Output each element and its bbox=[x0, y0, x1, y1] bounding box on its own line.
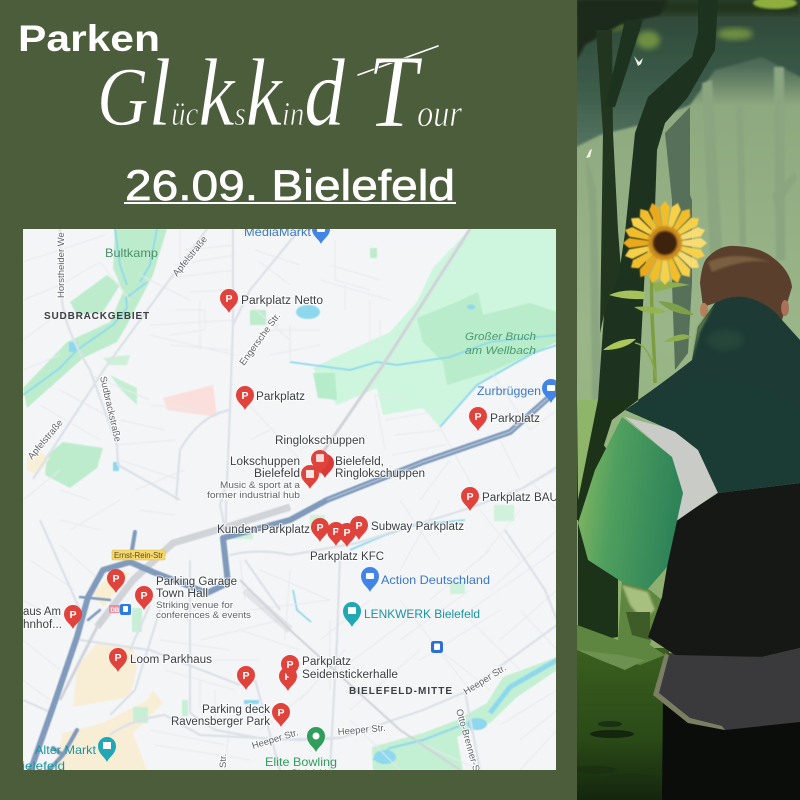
map labels: districts and streets: Str. bbox=[218, 754, 229, 768]
map labels: coloured points of interest: LENKWERK Bielefeld bbox=[364, 607, 480, 621]
map labels: parking and places: former industrial hub bbox=[207, 490, 300, 501]
map labels: coloured points of interest: Zurbrüggen bbox=[477, 384, 541, 398]
road sign: Ernst-Rein-Str: Ernst-Rein-Str bbox=[114, 551, 163, 560]
map labels: parking and places: Striking venue for bbox=[156, 600, 233, 611]
map labels: parking and places: Loom Parkhaus bbox=[130, 654, 212, 666]
pin: Parkhaus am Bahnhof bbox=[64, 605, 82, 629]
map labels: districts and streets: Engersche Str. bbox=[238, 311, 283, 368]
icon: bus stop bbox=[431, 641, 443, 653]
map labels: coloured points of interest: Bielefeld bbox=[292, 768, 327, 778]
icon: DB station bbox=[109, 604, 131, 615]
map labels: districts and streets: Bultkamp bbox=[105, 246, 158, 260]
person: hem bbox=[653, 648, 800, 730]
forest floor bbox=[573, 580, 669, 800]
map labels: districts and streets: Sudbrackstraße bbox=[97, 375, 123, 443]
person: teal upper body bbox=[625, 340, 800, 493]
person: hood bbox=[638, 297, 800, 410]
map streets bbox=[23, 229, 560, 770]
map labels: parking and places: aus Am bbox=[23, 606, 61, 618]
map labels: parking and places: Bielefeld, bbox=[335, 456, 384, 468]
map labels: parking and places: hnhof... bbox=[23, 619, 62, 631]
misty forest background bbox=[577, 0, 800, 660]
map labels: parking and places: Parkplatz Netto bbox=[241, 295, 323, 307]
mid-distance tree bbox=[665, 107, 692, 370]
map labels: coloured points of interest bbox=[13, 225, 541, 778]
icon: white butterflies bbox=[586, 56, 643, 158]
map labels: districts and streets: Heeper Str. bbox=[251, 727, 300, 752]
map areas: parks and land use bbox=[23, 229, 557, 770]
person: dark jacket body bbox=[648, 483, 800, 657]
map labels: parking and places: Music & sport at a bbox=[220, 480, 301, 491]
pin: Kunden-Parkplatz bbox=[311, 518, 329, 542]
map labels: parking and places: Parkplatz bbox=[490, 413, 540, 425]
map labels: parking and places: Lokschuppen bbox=[230, 456, 300, 468]
pin: Parkplatz east bbox=[469, 407, 487, 431]
person: ears bbox=[700, 303, 708, 317]
map labels: districts and streets: am Wellbach bbox=[465, 345, 536, 357]
map labels: districts and streets: SUDBRACKGEBIET bbox=[44, 311, 150, 322]
pin: Kunden-Parkplatz: P bbox=[316, 522, 324, 534]
pin: Parking deck Ravensberger Park: P bbox=[277, 707, 285, 719]
map labels: coloured points of interest: Alter Markt bbox=[35, 743, 97, 757]
map labels: districts and streets: Apfelstraße bbox=[171, 234, 210, 279]
map motorway bbox=[30, 392, 555, 772]
icon: Zurbrüggen blue pin bbox=[542, 379, 556, 403]
panel: parking map bbox=[13, 220, 560, 780]
pin: Parkplatz KFC two: P bbox=[343, 527, 351, 539]
sunflower stem and leaves bbox=[603, 273, 694, 383]
pin: Ringlokschuppen music bbox=[320, 454, 334, 478]
pin: Parkplatz BAU bbox=[461, 487, 479, 511]
pin: Parkplatz Netto bbox=[220, 289, 238, 313]
person seen from behind bbox=[578, 246, 800, 800]
map labels: parking and places: conferences & events bbox=[156, 610, 251, 621]
map labels: coloured points of interest: Elite Bowling bbox=[265, 755, 337, 769]
pin: Parkhaus am Bahnhof: P bbox=[69, 609, 77, 621]
pin: Lokschuppen venue bbox=[301, 465, 319, 489]
map labels: districts and streets: Horstheider We bbox=[56, 232, 67, 298]
map labels: parking and places: Ringlokschuppen bbox=[275, 435, 365, 447]
heading: Glückskind Tour script title: Tour bbox=[368, 34, 462, 149]
icon: Action blue pin bbox=[361, 567, 379, 592]
map labels: districts and streets: Großer Bruch bbox=[465, 331, 536, 343]
pin: station north bbox=[107, 569, 125, 593]
pin: Seidenstickerhalle lower bbox=[279, 667, 297, 691]
person: trousers bbox=[662, 700, 800, 800]
icon: DB station: DB bbox=[110, 608, 120, 614]
pin: unnamed parking: P bbox=[242, 670, 250, 682]
map labels: coloured points of interest: MediaMarkt bbox=[244, 225, 312, 239]
map labels: coloured points of interest: Bielefeld bbox=[13, 759, 65, 773]
map labels: parking and places: Ringlokschuppen bbox=[335, 468, 425, 480]
sunflower bbox=[603, 201, 707, 383]
map labels: districts and streets: BIELEFELD-MITTE bbox=[349, 686, 452, 697]
map labels: parking and places: Ravensberger Park bbox=[171, 716, 270, 728]
parking pins bbox=[64, 289, 487, 727]
dark trees bbox=[598, 0, 718, 400]
pin: Subway Parkplatz: P bbox=[355, 520, 363, 532]
pin: Seidenstickerhalle upper: P bbox=[286, 659, 294, 671]
pin: Parkplatz BAU: P bbox=[466, 491, 474, 503]
person: hair bbox=[700, 246, 792, 320]
map labels: parking and places: Bielefeld bbox=[254, 468, 300, 480]
map labels: districts and streets bbox=[26, 232, 536, 780]
icon: Elite Bowling green pin bbox=[307, 727, 325, 752]
pin: Parkplatz: P bbox=[241, 390, 249, 402]
pin: Parkplatz KFC one: P bbox=[332, 526, 340, 538]
map labels: coloured points of interest: Action Deutschland bbox=[381, 573, 490, 587]
pin: Ringlokschuppen transit bbox=[311, 450, 329, 474]
pin: Loom Parkhaus bbox=[109, 648, 127, 672]
pin: Seidenstickerhalle upper bbox=[281, 655, 299, 679]
pin: Parkplatz KFC one bbox=[327, 522, 342, 546]
pin: Parking Garage Town Hall: P bbox=[140, 590, 148, 602]
pin: Parkplatz bbox=[236, 386, 254, 410]
map labels: districts and streets: Heeper Str. bbox=[337, 723, 386, 738]
person: ear right bbox=[781, 300, 789, 316]
heading: Parken: Parken bbox=[18, 18, 160, 59]
pin: Parkplatz KFC two bbox=[338, 523, 356, 547]
map labels: parking and places: Parkplatz bbox=[302, 656, 351, 668]
icon: Alter Markt teal pin bbox=[98, 737, 116, 762]
pin: unnamed parking bbox=[237, 666, 255, 690]
heading: 26.09. Bielefeld: 26.09. Bielefeld bbox=[125, 162, 455, 210]
faded distant trees bbox=[585, 67, 797, 400]
person: green sleeve bbox=[578, 417, 683, 590]
pin: Parking Garage Town Hall bbox=[135, 586, 153, 610]
icon: MediaMarkt blue pin bbox=[312, 229, 330, 244]
map water: rivers and ponds bbox=[23, 229, 557, 764]
map labels: parking and places: Parkplatz bbox=[256, 391, 305, 403]
pin: Subway Parkplatz bbox=[350, 516, 368, 540]
map labels: districts and streets: Otto-Brenner-Str. bbox=[453, 708, 484, 780]
sunflower petals bbox=[623, 201, 707, 285]
panel: forest illustration bbox=[570, 0, 800, 800]
pin: Parking deck Ravensberger Park bbox=[272, 703, 290, 727]
sunflower centre bbox=[648, 226, 682, 260]
pin: Parkplatz east: P bbox=[474, 411, 482, 423]
map labels: parking and places: Seidenstickerhalle bbox=[302, 669, 398, 681]
person: white stripe bbox=[625, 417, 718, 522]
pin: Loom Parkhaus: P bbox=[114, 652, 122, 664]
map labels: parking and places: Parkplatz BAU bbox=[482, 492, 558, 504]
map labels: districts and streets: Apfelstraße bbox=[26, 418, 66, 462]
map labels: parking and places: Town Hall bbox=[156, 588, 208, 600]
map railway bbox=[60, 229, 470, 770]
map labels: parking and places: Parking deck bbox=[202, 704, 270, 716]
pin: Parkplatz Netto: P bbox=[225, 293, 233, 305]
map labels: parking and places: Kunden-Parkplatz bbox=[217, 524, 310, 536]
map labels: parking and places: Parkplatz KFC bbox=[310, 551, 384, 563]
pin: Seidenstickerhalle lower: P bbox=[284, 671, 292, 683]
map labels: parking and places: Subway Parkplatz bbox=[371, 521, 464, 533]
heading: Glückskind Tour script title bbox=[97, 34, 462, 149]
icon: LENKWERK teal pin bbox=[343, 602, 361, 627]
map labels: parking and places bbox=[23, 295, 558, 728]
map labels: parking and places: Parking Garage bbox=[156, 576, 237, 588]
pin: station north: P bbox=[112, 573, 120, 585]
map labels: districts and streets: Heeper Str. bbox=[462, 663, 508, 698]
heading: Glückskind Tour script title: Glückskind bbox=[97, 39, 346, 146]
